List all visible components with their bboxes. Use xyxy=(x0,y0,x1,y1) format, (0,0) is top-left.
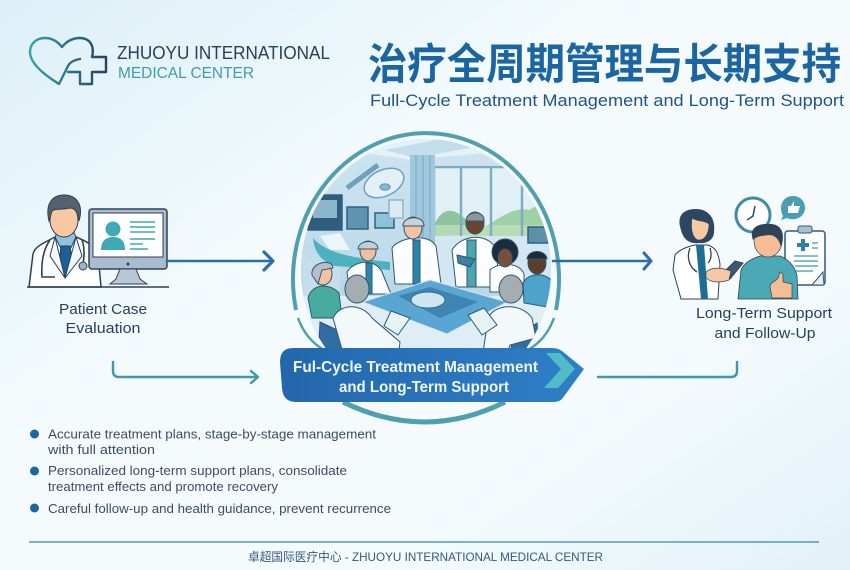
foreground doctor left xyxy=(318,274,411,348)
label: long-term support and follow-up xyxy=(696,305,833,342)
icon: doctor and patient follow-up xyxy=(673,196,825,299)
icon: doctor at computer xyxy=(27,195,169,287)
windows xyxy=(433,165,555,286)
subtitle: Full-Cycle Treatment Management and Long-Term Support xyxy=(370,91,844,110)
label: patient case evaluation: Patient Case xyxy=(59,301,147,318)
patient xyxy=(738,224,798,299)
footer text: 卓超国际医疗中心 - ZHUOYU INTERNATIONAL MEDICAL CENTER xyxy=(248,549,603,564)
curtain xyxy=(410,155,435,244)
ceiling xyxy=(370,139,482,160)
icon: heart with medical cross xyxy=(30,38,106,84)
label: patient case evaluation: Evaluation xyxy=(66,320,140,337)
bullet 2 xyxy=(30,464,347,494)
circle ring xyxy=(293,133,559,422)
banner text line 1: Ful-Cycle Treatment Management xyxy=(293,359,538,376)
patient bed xyxy=(313,238,390,270)
team meeting scene xyxy=(301,139,551,348)
doctor standing centre xyxy=(392,217,441,284)
connector: banner to follow-up xyxy=(598,362,737,377)
central circle illustration xyxy=(293,133,559,422)
banner text line 2: and Long-Term Support xyxy=(339,379,509,396)
arrow: team to follow-up xyxy=(553,253,651,269)
banner: full-cycle management xyxy=(280,348,584,402)
bullet 1: Accurate treatment plans, stage-by-stage management xyxy=(48,428,377,442)
nurse left in teal xyxy=(308,262,342,318)
computer monitor xyxy=(89,209,167,284)
logo text: line 1: ZHUOYU INTERNATIONAL xyxy=(117,42,330,63)
wall monitors xyxy=(308,195,552,243)
female doctor xyxy=(673,209,743,299)
clock xyxy=(736,198,770,232)
label: long-term support and follow-up: and Follow-Up xyxy=(714,325,816,342)
clipboard xyxy=(785,226,825,285)
bullet 3: Careful follow-up and health guidance, prevent recurrence xyxy=(48,502,391,516)
footer rule xyxy=(29,541,819,543)
logo text: line 2: MEDICAL CENTER xyxy=(118,65,254,82)
doctor standing right with tablet xyxy=(452,212,498,287)
doctor left older xyxy=(347,241,391,294)
banner shape xyxy=(280,348,584,402)
bullet 1: with full attention xyxy=(47,443,155,457)
doctor figure xyxy=(29,195,101,287)
doctor right with blue scrubs xyxy=(523,252,553,308)
logo xyxy=(30,38,330,84)
surgical lamp xyxy=(346,163,405,198)
arrow: evaluation to team xyxy=(167,252,273,270)
bullet 2: Personalized long-term support plans, consolidate xyxy=(48,464,347,478)
bullet list xyxy=(30,428,391,516)
conference table xyxy=(363,280,507,334)
bullet 1 xyxy=(30,428,377,457)
floor xyxy=(304,296,546,348)
bullet 2: treatment effects and promote recovery xyxy=(48,480,279,494)
icon: teal chevron xyxy=(544,353,575,388)
label: patient case evaluation xyxy=(59,301,147,337)
thumbs-up bubble xyxy=(781,196,805,220)
arrow: lower teal to banner xyxy=(113,362,258,383)
foreground doctor right xyxy=(467,274,538,348)
label: long-term support and follow-up: Long-Term Support xyxy=(696,305,833,322)
nurse dark hair xyxy=(490,239,524,292)
